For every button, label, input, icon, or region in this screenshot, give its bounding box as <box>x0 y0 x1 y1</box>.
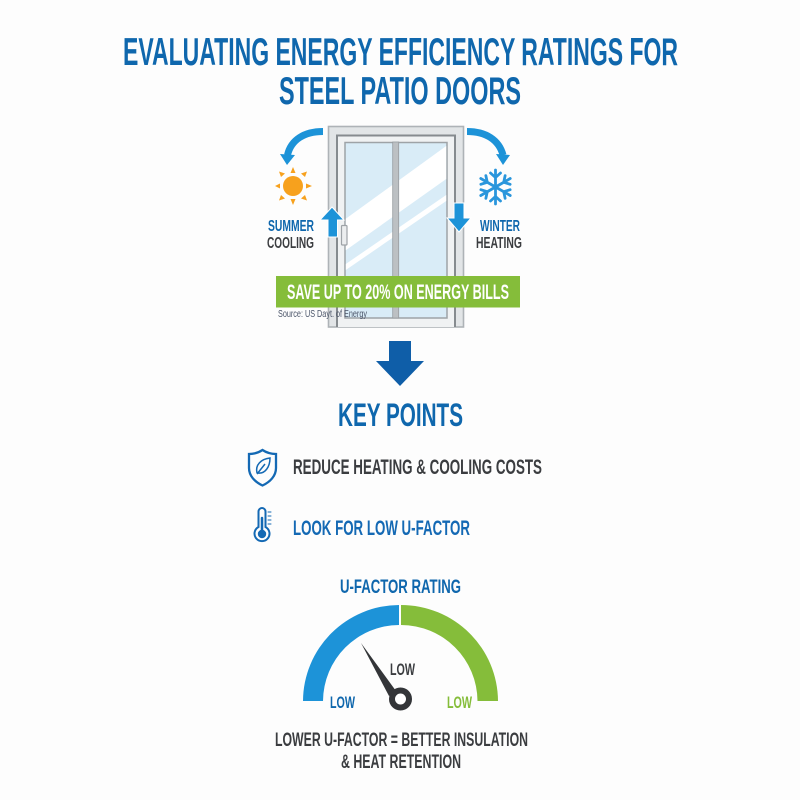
label: winter heating <box>476 218 522 252</box>
icon: sun <box>275 167 312 205</box>
gauge caption: LOWER U-FACTOR = BETTER INSULATION <box>275 730 528 751</box>
arrow: curved to sun <box>280 132 323 165</box>
heading: key points: KEY POINTS <box>338 397 463 433</box>
gauge label: low center: LOW <box>390 660 416 679</box>
gauge caption: & HEAT RETENTION <box>341 752 461 773</box>
gauge arc: blue <box>303 605 399 701</box>
source note: Source: US Dayt. of Energy <box>278 309 367 320</box>
label: summer cooling: SUMMER <box>268 218 314 235</box>
gauge label: low blue: LOW <box>330 693 356 712</box>
door illustration <box>328 126 464 327</box>
arrow: curved to snowflake <box>467 132 510 165</box>
icon: shield with leaf <box>249 450 276 486</box>
title <box>123 31 678 113</box>
label: summer cooling <box>267 218 314 252</box>
key point: low u-factor: LOOK FOR LOW U-FACTOR <box>293 516 470 540</box>
gauge caption <box>275 730 528 773</box>
gauge section <box>275 576 528 773</box>
gauge arc: green <box>401 605 498 701</box>
key point: reduce costs: REDUCE HEATING & COOLING COSTS <box>293 455 542 479</box>
savings banner <box>276 276 520 308</box>
door inner frame <box>337 136 455 327</box>
glass panes <box>345 142 447 318</box>
gauge label: low green: LOW <box>447 693 473 712</box>
key point: reduce costs <box>249 450 542 486</box>
arrow: large down <box>376 341 424 386</box>
label: summer cooling: COOLING <box>267 235 314 252</box>
door outer frame <box>328 126 464 327</box>
icon: thermometer <box>254 508 271 541</box>
door handle <box>342 226 347 245</box>
key point: low u-factor <box>254 508 470 541</box>
savings banner: SAVE UP TO 20% ON ENERGY BILLS <box>287 281 509 304</box>
icon: snowflake <box>478 170 513 204</box>
label: winter heating: HEATING <box>476 235 522 252</box>
title: STEEL PATIO DOORS <box>279 70 521 113</box>
arrow: up <box>320 207 344 237</box>
label: winter heating: WINTER <box>480 218 520 235</box>
arrow: down <box>447 203 471 232</box>
gauge needle <box>361 643 409 708</box>
gauge title: U-FACTOR RATING <box>340 576 461 598</box>
